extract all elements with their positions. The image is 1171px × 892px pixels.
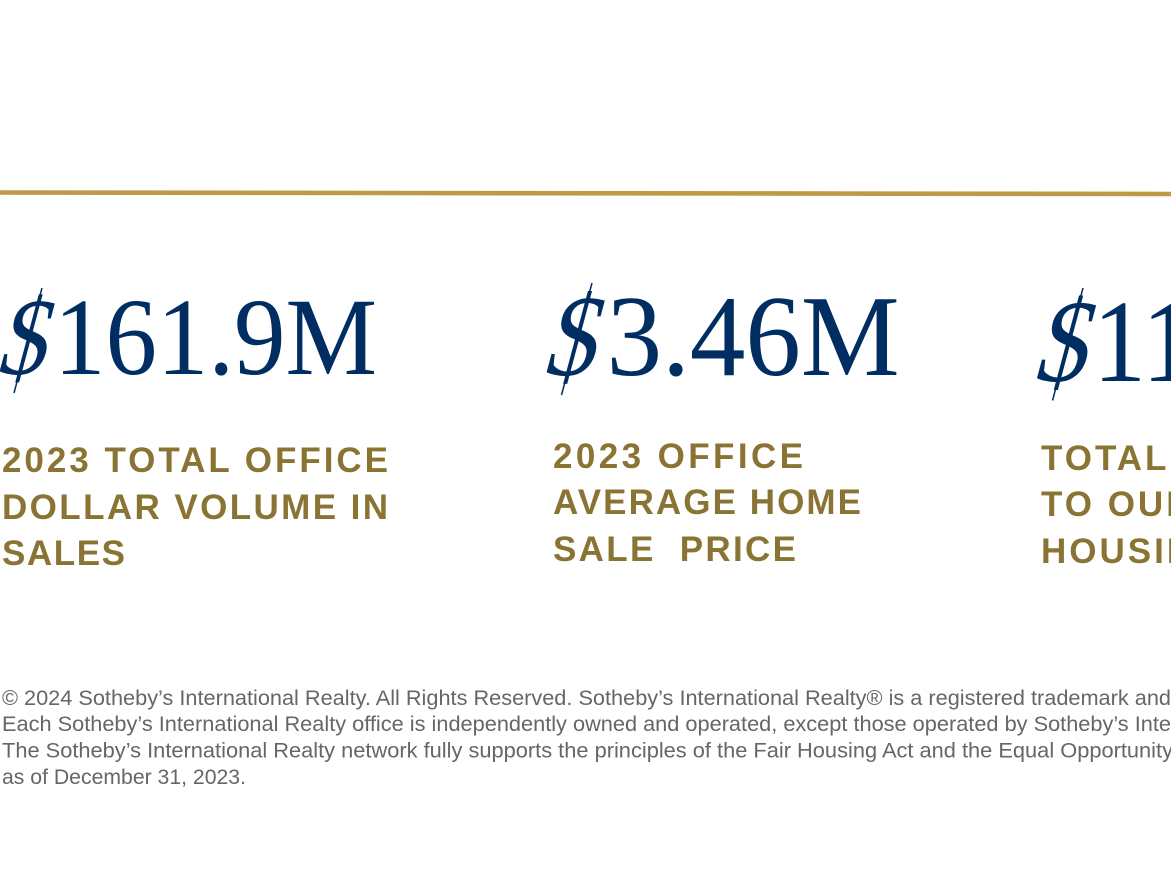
footer legal text	[2, 687, 1171, 789]
stat: $161.9M: 161.9M	[54, 276, 377, 398]
stat: $11	[1025, 276, 1171, 407]
label: total to our housing	[1041, 439, 1171, 571]
label: 2023 total office dollar volume in sales: SALES	[2, 534, 125, 573]
label: 2023 office average home sale price: SALE PRICE	[553, 530, 796, 569]
stat: $11: $	[1025, 276, 1112, 407]
label: 2023 office average home sale price	[553, 437, 861, 569]
label: 2023 office average home sale price: AVERAGE HOME	[553, 483, 861, 522]
label: total to our housing: TOTAL	[1041, 439, 1169, 478]
label: 2023 total office dollar volume in sales	[2, 441, 388, 573]
footer legal text: © 2024 Sotheby’s International Realty. All Rights Reserved. Sotheby’s International Realty® is a registered trademark and	[2, 687, 1171, 710]
label: 2023 office average home sale price: 2023 OFFICE	[553, 437, 803, 476]
panel: third statistic, cropped at right edge	[1025, 276, 1171, 571]
footer legal text: Each Sotheby’s International Realty office is independently owned and operated, except those operated by Sotheby’s Inte	[2, 713, 1171, 736]
stat: $3.46M: $	[535, 273, 620, 401]
label: 2023 total office dollar volume in sales: 2023 TOTAL OFFICE	[2, 441, 388, 480]
label: 2023 total office dollar volume in sales: DOLLAR VOLUME IN	[2, 488, 388, 527]
panel: office average home sale price	[535, 273, 900, 569]
panel: total office dollar volume	[0, 276, 388, 573]
stat: $3.46M: 3.46M	[607, 273, 900, 401]
footer legal text: The Sotheby’s International Realty network fully supports the principles of the Fair Housing Act and the Equal Opportunity	[2, 740, 1171, 762]
footer legal text: as of December 31, 2023.	[2, 766, 246, 789]
